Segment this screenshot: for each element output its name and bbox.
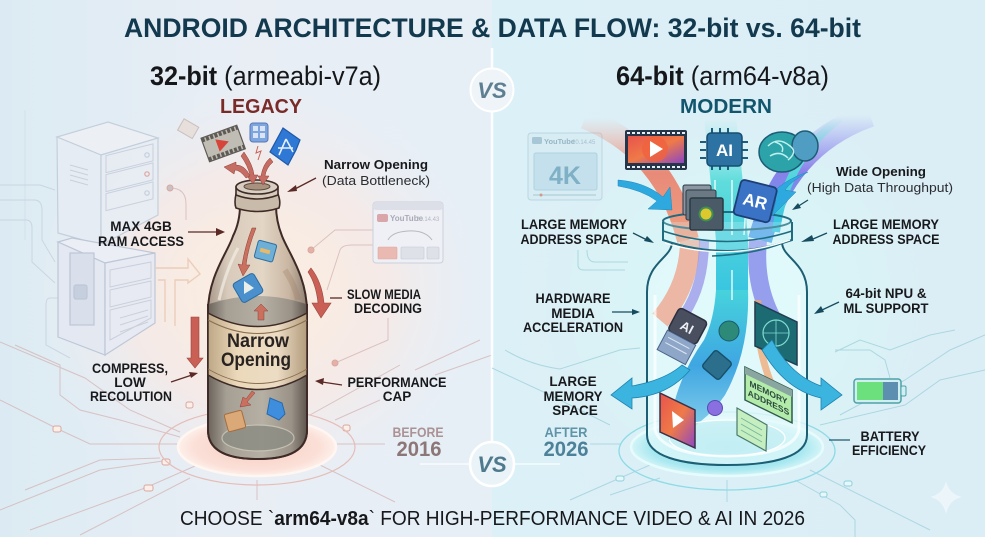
callout: compress low recolution: RECOLUTION xyxy=(90,389,172,404)
icon: video in jar xyxy=(660,393,695,448)
callout: large memory address space right: LARGE MEMORY xyxy=(833,217,939,232)
callout: compress low recolution: LOW xyxy=(114,375,146,390)
icon: server rack bottom xyxy=(58,238,155,355)
bottle label: Opening xyxy=(221,350,291,371)
label: before 2016: BEFORE xyxy=(392,424,444,440)
callout: hardware media acceleration xyxy=(523,291,640,335)
callout: battery efficiency: BATTERY xyxy=(860,429,920,444)
callout: large memory space: MEMORY xyxy=(544,389,602,404)
icon: AI chip: AI xyxy=(716,141,733,160)
data streams flowing into jar xyxy=(585,115,870,392)
large red arrows outside bottle xyxy=(187,268,331,368)
circuit traces: right xyxy=(492,250,985,537)
callout: narrow opening: Narrow Opening xyxy=(324,157,428,172)
icon: neural brain xyxy=(759,131,818,172)
label: before 2016: 2016 xyxy=(396,438,442,461)
icon: faded 4K youtube window: 4K xyxy=(549,162,581,190)
icon: sparkle xyxy=(930,481,962,514)
icon: faded 4K youtube window: 20.14.45 xyxy=(572,140,596,146)
bottle label xyxy=(208,313,307,390)
floating icons above bottle xyxy=(178,119,300,165)
icon: circuit chip xyxy=(702,350,732,380)
ground ring: right xyxy=(619,412,835,490)
icon: faded 4K youtube window: YouTube xyxy=(544,137,575,146)
jar interior fill xyxy=(647,240,807,465)
callout: compress low recolution xyxy=(90,361,198,404)
callout: performance cap: PERFORMANCE xyxy=(348,375,446,390)
ground ring: left xyxy=(159,409,355,485)
callout: large memory address space left xyxy=(520,217,654,247)
bottle xyxy=(208,180,307,459)
circuit nodes: left xyxy=(53,185,350,491)
heading: legacy: LEGACY xyxy=(220,96,303,118)
icon: memory address window xyxy=(745,367,792,423)
callout: large memory space xyxy=(544,374,602,418)
icon: purple blob xyxy=(708,400,722,416)
callout: hardware media acceleration: ACCELERATION xyxy=(523,320,623,335)
icon: round node xyxy=(719,321,739,341)
icon: faded youtube window left: 20.14.43 xyxy=(416,217,440,223)
callout: narrow opening xyxy=(287,157,430,192)
callout: max 4GB: MAX 4GB xyxy=(110,219,172,234)
divider xyxy=(491,48,493,442)
arrows into bottle neck xyxy=(224,152,273,185)
callout: 64-bit NPU: 64-bit NPU & xyxy=(846,286,927,301)
icon: AI chip xyxy=(700,128,748,170)
callout: wide opening: (High Data Throughput) xyxy=(807,180,953,195)
blue arrow into jar right xyxy=(766,172,808,216)
callout: wide opening: Wide Opening xyxy=(836,164,926,179)
icon: radar panel xyxy=(755,302,797,365)
callout: large memory space: LARGE xyxy=(549,374,597,389)
icon: video film xyxy=(625,130,687,170)
icon: green sheet xyxy=(737,408,767,451)
icon: memory address window: ADDRESS xyxy=(748,388,789,417)
background arrow: to bottle xyxy=(155,259,200,326)
heading: modern: MODERN xyxy=(680,96,772,118)
callout: slow media decoding xyxy=(330,287,422,316)
label: after 2026: 2026 xyxy=(544,438,588,461)
title: ANDROID ARCHITECTURE & DATA FLOW: 32-bit vs. 64-bit xyxy=(124,13,861,43)
callout: 64-bit NPU xyxy=(814,286,929,316)
arrows inside bottle xyxy=(238,228,268,407)
callout: large memory address space left: LARGE MEMORY xyxy=(521,217,627,232)
icon: faded 4K youtube window xyxy=(528,133,602,200)
callout: max 4GB: RAM ACCESS xyxy=(98,234,184,249)
badge: vs bottom xyxy=(420,442,560,486)
callout: large memory space: SPACE xyxy=(552,403,598,418)
callout: large memory address space right xyxy=(801,217,940,247)
callout: narrow opening: (Data Bottleneck) xyxy=(322,173,430,188)
badge: vs top: VS xyxy=(477,78,507,103)
callout: hardware media acceleration: HARDWARE xyxy=(536,291,610,306)
callout: slow media decoding: DECODING xyxy=(354,301,422,316)
badge: vs top xyxy=(470,68,514,112)
icon: faded youtube window left xyxy=(373,202,443,263)
callout: battery efficiency: EFFICIENCY xyxy=(852,443,926,458)
jar xyxy=(647,212,807,465)
icon: AI processor in jar xyxy=(657,307,708,365)
bottle label: Narrow xyxy=(227,331,289,352)
icon: layered chip cards xyxy=(683,185,723,230)
footer call to action: CHOOSE `arm64-v8a` FOR HIGH-PERFORMANCE VIDEO & AI IN 2026 xyxy=(180,508,805,530)
icon: AR tile: AR xyxy=(741,189,769,214)
label: before 2016 xyxy=(392,424,444,461)
label: after 2026: AFTER xyxy=(544,424,588,440)
stream band flowing to jar floor xyxy=(668,290,748,440)
icon: AR tile xyxy=(733,179,778,223)
callout: large memory address space left: ADDRESS SPACE xyxy=(520,232,628,247)
icon: battery xyxy=(854,379,906,403)
panel: right background xyxy=(492,0,985,537)
callout: compress low recolution: COMPRESS, xyxy=(92,361,168,376)
icon: AI processor in jar: AI xyxy=(678,318,696,337)
callout: performance cap: CAP xyxy=(383,389,411,404)
callout: slow media decoding: SLOW MEDIA xyxy=(347,287,421,302)
icon: memory address window: MEMORY xyxy=(750,379,787,407)
icons inside bottle xyxy=(224,240,285,432)
output arrow: right xyxy=(762,340,842,410)
label: after 2026 xyxy=(544,424,588,461)
callout: wide opening xyxy=(792,164,953,210)
circuit traces: left xyxy=(0,110,492,535)
icon: faded youtube window left: YouTube xyxy=(390,214,424,223)
badge: vs bottom: VS xyxy=(477,452,507,477)
callout: 64-bit NPU: ML SUPPORT xyxy=(844,301,929,316)
circuit nodes: right xyxy=(616,476,852,497)
output arrow: left xyxy=(611,365,690,409)
icon: server rack top xyxy=(57,122,158,245)
callout: large memory address space right: ADDRESS SPACE xyxy=(832,232,940,247)
callout: max 4GB xyxy=(98,219,225,249)
heading: 32-bit: 32-bit (armeabi-v7a) xyxy=(150,61,381,91)
heading: 64-bit: 64-bit (arm64-v8a) xyxy=(616,61,829,91)
callout: performance cap xyxy=(315,375,446,404)
stream highlights xyxy=(715,180,747,300)
panel: left background xyxy=(0,0,493,537)
blue arrow into jar left xyxy=(618,180,672,210)
callout: battery efficiency xyxy=(829,429,926,458)
callout: hardware media acceleration: MEDIA xyxy=(551,306,595,321)
